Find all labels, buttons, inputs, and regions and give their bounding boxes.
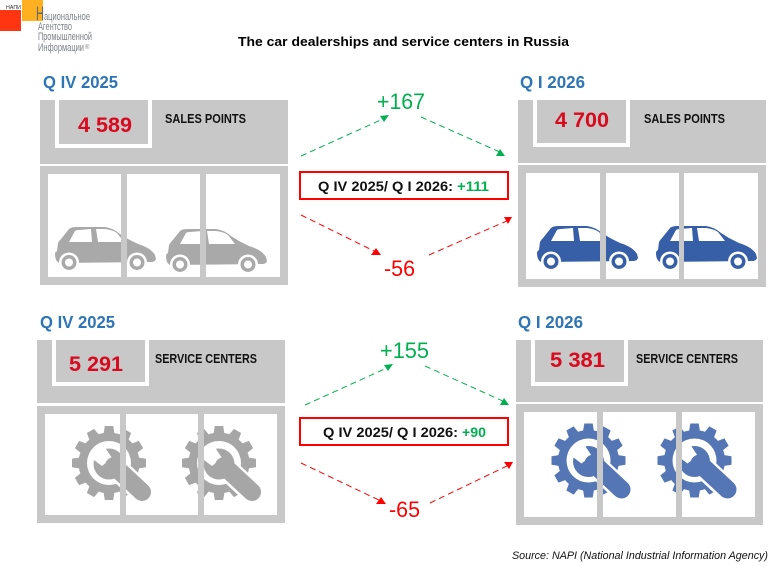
arrow: decrease out [429, 217, 512, 255]
logo: Н [36, 4, 44, 25]
decrease value: -56 [384, 256, 415, 281]
value box [533, 100, 630, 147]
value box [531, 340, 628, 386]
showroom [518, 165, 766, 287]
icon: gear and wrench [182, 426, 257, 500]
value box: 5 381 [550, 349, 605, 372]
panel: service centers Q I 2026 [516, 312, 763, 525]
header band [516, 340, 763, 402]
workshop [516, 404, 763, 525]
value box: 4 700 [555, 109, 609, 132]
arrow: increase in [305, 364, 393, 405]
arrow: increase out [425, 366, 509, 405]
icon: gear and wrench [72, 426, 147, 500]
label: SERVICE CENTERS [636, 352, 738, 366]
logo: ациональное [44, 11, 90, 23]
net change box [300, 418, 508, 445]
value box [52, 340, 149, 386]
value box [55, 100, 152, 148]
logo: НАПИ [6, 5, 21, 11]
logo: Информации [38, 42, 84, 54]
header band [40, 100, 288, 164]
logo [0, 0, 92, 54]
arrow: decrease in [301, 463, 386, 504]
arrow: decrease out [430, 462, 513, 503]
icon: car [166, 229, 267, 274]
panel: service centers Q IV 2025 [37, 312, 285, 523]
header band [37, 340, 285, 403]
value box: 4 589 [78, 114, 132, 137]
logo: Агентство [38, 21, 72, 33]
showroom [40, 166, 288, 285]
icon: car [537, 226, 638, 272]
icon: gear and wrench [552, 424, 626, 498]
arrow: increase out [421, 117, 505, 156]
increase value: +167 [377, 89, 425, 114]
net change box: +90 [462, 424, 486, 440]
heading: Q I 2026 [518, 312, 583, 332]
net change box: Q IV 2025/ Q I 2026: [318, 178, 453, 194]
net change box [300, 172, 508, 199]
heading: Q I 2026 [520, 72, 585, 92]
source note: Source: NAPI (National Industrial Information Agency) [512, 550, 768, 562]
heading: Q IV 2025 [43, 72, 118, 92]
label: SERVICE CENTERS [155, 352, 257, 366]
logo: ® [85, 44, 90, 51]
logo: Промышленной [38, 31, 92, 43]
icon: car [55, 227, 156, 272]
title: The car dealerships and service centers in Russia [238, 34, 570, 49]
net change box: +111 [457, 178, 489, 194]
label: SALES POINTS [644, 112, 725, 126]
header band [518, 100, 766, 163]
icon: gear and wrench [658, 424, 732, 498]
panel: sales points Q IV 2025 [40, 72, 288, 285]
panel: sales points change [300, 89, 512, 281]
label: SALES POINTS [165, 112, 246, 126]
panel: service centers change [300, 338, 513, 522]
value box: 5 291 [69, 353, 123, 376]
heading: Q IV 2025 [40, 312, 115, 332]
panel: sales points Q I 2026 [518, 72, 766, 287]
net change box: Q IV 2025/ Q I 2026: [323, 424, 458, 440]
decrease value: -65 [389, 497, 420, 522]
arrow: decrease in [301, 215, 381, 255]
arrow: increase in [301, 115, 389, 156]
workshop [37, 406, 285, 523]
increase value: +155 [380, 338, 429, 363]
icon: car [656, 226, 757, 272]
